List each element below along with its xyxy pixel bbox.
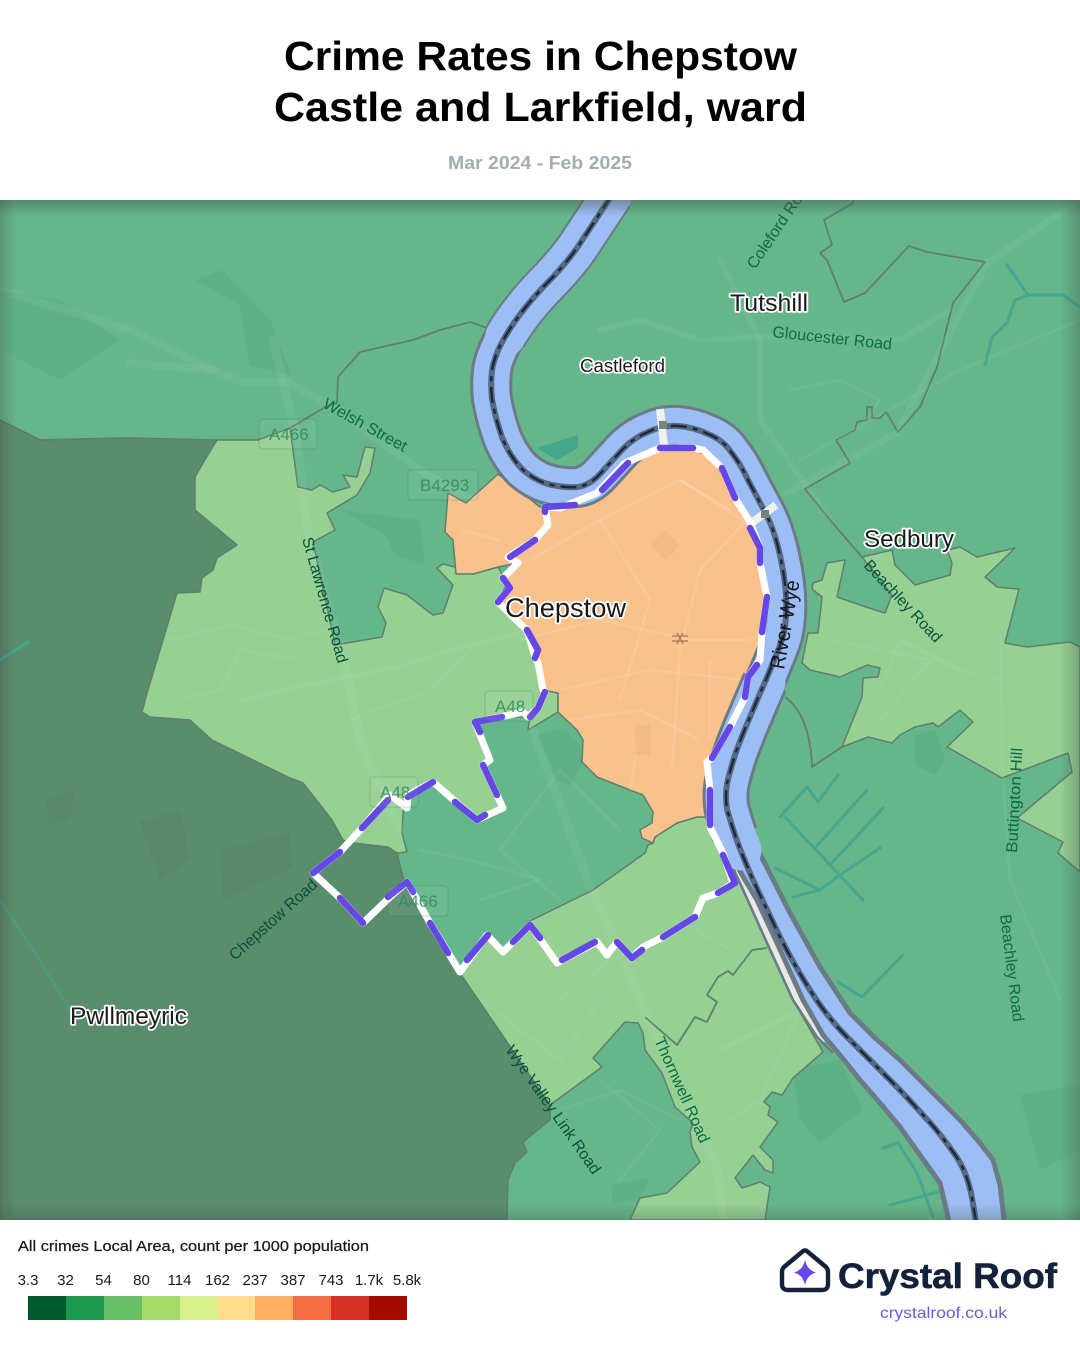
place labels: Castleford [580,356,665,376]
bridges over the river [659,409,776,524]
region: medium green base [0,200,1080,1220]
road name labels: St Lawrence Road [298,535,350,665]
road name labels: Gloucester Road [772,324,893,354]
road shields: A466 [398,892,438,911]
legend scale labels: 5.8k [393,1272,422,1289]
legend [18,1239,422,1320]
River Wye [491,195,1005,1228]
legend scale labels: 80 [133,1272,150,1289]
road name labels [226,191,1026,1178]
legend scale labels: 3.3 [18,1272,38,1289]
title: Castle and Larkfield, ward [274,84,807,130]
region: orange Chepstow [445,448,767,843]
subtitle: date range: Mar 2024 - Feb 2025 [448,153,632,173]
road name labels: Coleford Ro [744,191,806,272]
website link: crystalroof.co.uk [880,1305,1008,1322]
road shields: A48 [380,783,410,802]
legend scale labels: 1.7k [355,1272,384,1289]
legend scale labels: 114 [168,1272,191,1289]
sandy river bank [733,868,832,1052]
wordmark: Crystal Roof [838,1257,1057,1296]
map edge shading [0,200,1080,1220]
legend colour bar [28,1296,407,1320]
place labels [70,290,954,1030]
darker woodland patches [0,270,1080,1205]
place labels: Chepstow [505,593,626,623]
choropleth map [0,191,1080,1228]
region: light green south [460,817,823,1220]
dark woodland detail [45,790,292,900]
orange area streets [460,480,750,790]
legend scale labels [18,1272,422,1289]
title: Crime Rates in Chepstow [284,33,797,79]
place labels: Pwllmeyric [70,1003,187,1030]
road name labels: Buttington Hill [1004,747,1026,853]
region: light green Sedbury [802,547,1080,872]
road shields: A466 [269,425,309,444]
legend scale labels: 162 [205,1272,230,1289]
road name labels: Wye Valley Link Road [502,1043,603,1178]
region: light green west [142,428,558,853]
legend scale labels: 743 [318,1272,344,1289]
icon: railway station [672,633,688,644]
legend scale labels: 54 [95,1272,112,1289]
teal pond [537,435,578,460]
legend scale labels: 387 [280,1272,306,1289]
place labels: Tutshill [730,290,808,317]
ward boundary: Castle and Larkfield [313,448,767,972]
road name labels: Beachley Road [996,913,1026,1023]
river label: River Wye [766,578,805,671]
road shields: B4293 [420,476,469,495]
title [274,33,807,130]
logo: Crystal Roof [782,1250,1057,1322]
legend scale labels: 32 [57,1272,74,1289]
streams [0,265,1080,1217]
boundaries between statistical areas [0,200,985,1045]
road name labels: Chepstow Road [226,876,321,964]
road name labels: Beachley Road [860,557,945,646]
road network [192,334,1002,1094]
road shields: A48 [495,697,525,716]
region: dark green west [0,420,550,1220]
icon: house with star [782,1250,828,1290]
road name labels: Thornwell Road [650,1035,712,1146]
road name labels: Welsh Street [320,396,410,456]
legend scale labels: 237 [242,1272,268,1289]
legend title: All crimes Local Area, count per 1000 population [18,1239,369,1255]
place labels: Sedbury [864,526,954,553]
road shields [259,419,533,916]
